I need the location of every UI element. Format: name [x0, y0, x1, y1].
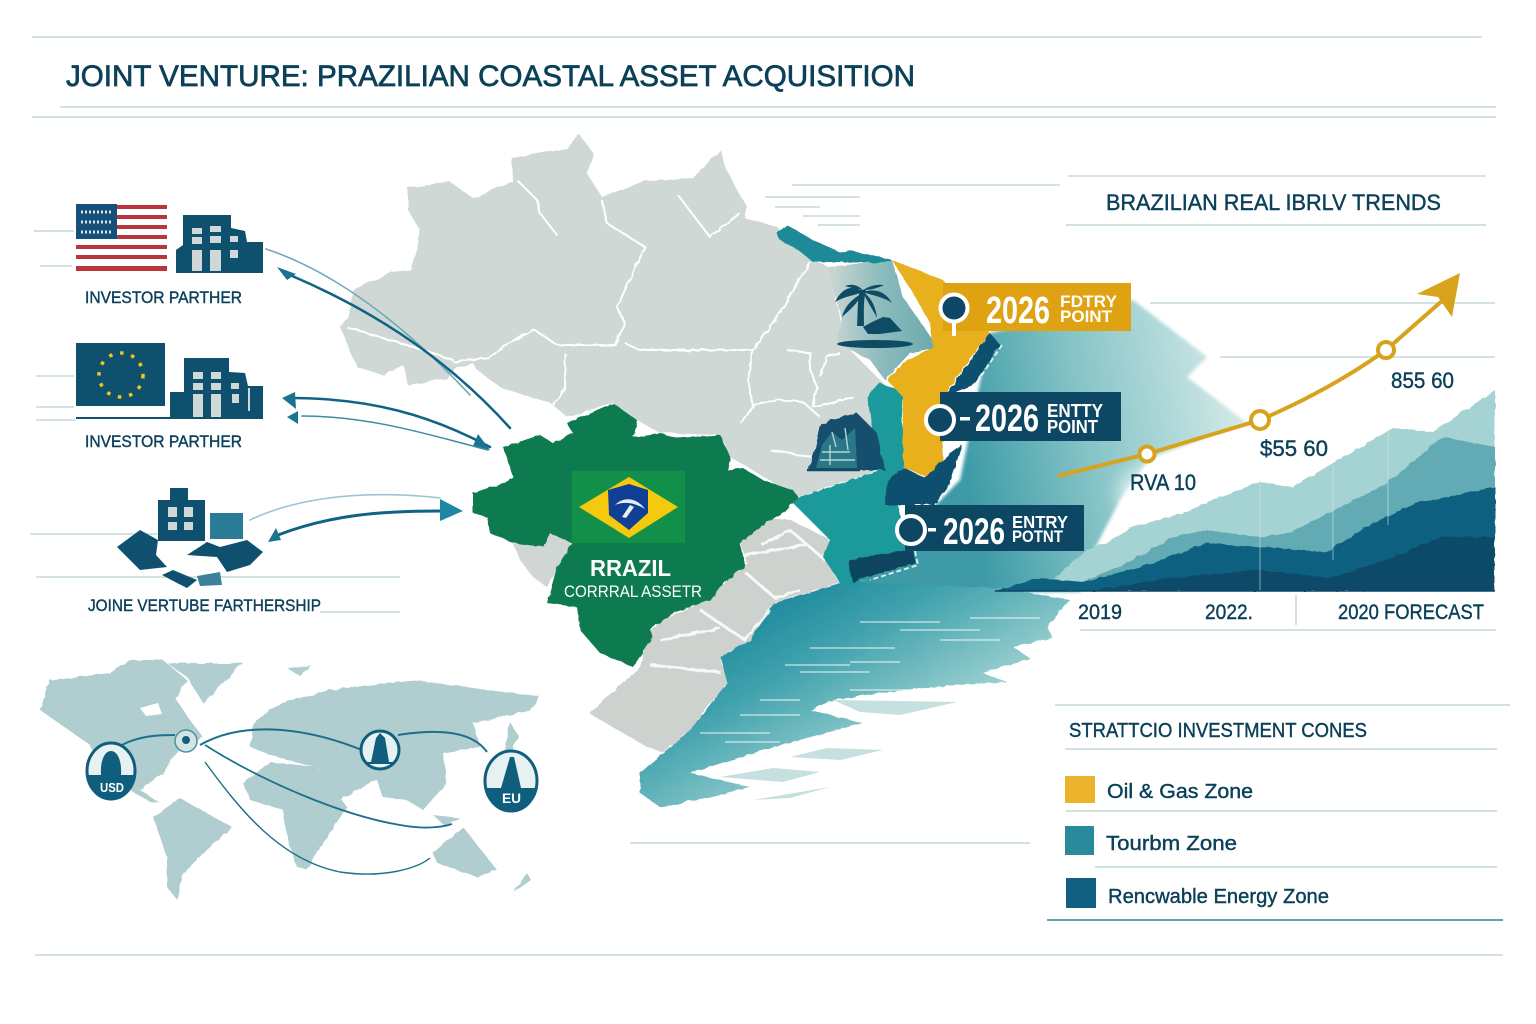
badge: USD: USD	[100, 780, 124, 795]
regional borders	[347, 180, 853, 672]
arrow: US partner outgoing	[266, 249, 470, 395]
legend item: tourism: Tourbm Zone	[1106, 833, 1237, 855]
tourism zone, central coast	[790, 383, 907, 585]
legend bottom rule	[1047, 919, 1503, 921]
Brazilian flag	[572, 471, 685, 543]
partner label: INVESTOR PARTHER	[85, 289, 242, 307]
axis labels: 2022.	[1205, 601, 1253, 624]
south-west neutral region	[513, 533, 572, 587]
data labels: 855 60	[1391, 368, 1454, 393]
legend item: oil and gas	[1065, 776, 1253, 803]
title: JOINT VENTURE: PRAZILIAN COASTAL ASSET ACQUISITION	[66, 60, 915, 93]
icon: EU flag	[76, 343, 165, 406]
entry point: gold: POINT	[1060, 307, 1113, 326]
continents	[40, 660, 540, 900]
south-east neutral regions	[590, 518, 840, 753]
icon: coastal cliff	[807, 413, 885, 470]
legend item: oil and gas: Oil & Gas Zone	[1107, 781, 1253, 803]
oil and gas zone	[887, 260, 990, 477]
region subtitle: CORRRAL ASSETR	[564, 583, 702, 601]
mountain area, mid layer	[1060, 437, 1495, 591]
entry point: navy upper: POINT	[1047, 417, 1098, 437]
badge: USD	[87, 743, 135, 799]
world map	[40, 660, 540, 900]
entry point: navy upper: 2026	[975, 398, 1039, 440]
data markers	[1140, 342, 1394, 462]
lower ocean	[640, 582, 1070, 807]
tourism zone, pale northern region	[827, 260, 933, 380]
data labels: RVA 10	[1130, 470, 1196, 495]
renewable zone, southern coast	[848, 548, 915, 582]
entry point: navy lower: ENTRY	[1012, 512, 1068, 532]
renewable zone, coast	[885, 333, 1000, 505]
arrow: US partner return	[277, 267, 510, 428]
chart heading: BRAZILIAN REAL IBRLV TRENDS	[1106, 190, 1441, 215]
investor partner: European Union	[76, 343, 263, 451]
legend item: renewable energy	[1066, 878, 1329, 908]
axis labels: 2019	[1078, 601, 1122, 624]
legend item: tourism	[1065, 826, 1237, 855]
icon: office building	[76, 358, 263, 419]
axis labels: 2020 FORECAST	[1338, 601, 1484, 624]
region name: RRAZIL	[590, 555, 671, 581]
white haze behind first label	[1120, 463, 1230, 527]
partner label: INVESTOR PARTHER	[85, 433, 242, 451]
entry point: navy upper	[926, 392, 1121, 441]
legend: strategic investment zones	[1047, 720, 1503, 920]
chart axis	[995, 590, 1495, 592]
tourism zone, northern strip	[777, 225, 892, 263]
legend heading: STRATTCIO INVESTMENT CONES	[1069, 720, 1367, 742]
arrow: partnership upper	[250, 495, 440, 520]
icon: office building	[176, 215, 263, 273]
badge: small hub	[175, 730, 197, 752]
route lines	[122, 729, 487, 874]
trend arrowhead	[1417, 273, 1460, 317]
coastal foam	[870, 345, 1002, 580]
entry point: gold: 2026	[986, 290, 1050, 332]
partnership label: JOINE VERTUBE FARTHERSHIP	[88, 596, 321, 615]
entry point: navy lower: 2026	[943, 511, 1005, 552]
entry point: gold: FDTRY	[1060, 292, 1118, 311]
icon: palm island	[835, 285, 913, 348]
arrow: EU partner lower	[287, 411, 488, 450]
trend line	[1058, 300, 1443, 476]
central asset region, green	[473, 403, 798, 667]
joint venture partnership	[88, 488, 321, 615]
badge: EU	[485, 751, 537, 811]
entry point: navy lower: POTNT	[1012, 527, 1064, 546]
data labels	[1130, 368, 1454, 495]
wave streaks	[700, 618, 1040, 742]
legend item: renewable energy: Rencwable Energy Zone	[1108, 886, 1329, 908]
mountain area, light layer	[1040, 390, 1495, 591]
ocean fan behind entry points	[850, 300, 1247, 592]
entry point: gold	[940, 283, 1131, 336]
entry point: navy lower	[897, 505, 1084, 552]
chart grid lines	[1260, 430, 1388, 590]
axis labels	[1078, 601, 1484, 624]
capital flow arrows	[250, 249, 510, 542]
white lake cutouts	[140, 703, 162, 716]
pale sea patches	[720, 700, 957, 800]
entry point: navy upper: ENTTY	[1047, 401, 1103, 421]
arrow: EU partner upper	[282, 392, 490, 450]
mountain area, dark layer	[995, 487, 1495, 591]
chart: BRL trend	[995, 190, 1495, 624]
data labels: $55 60	[1260, 436, 1328, 461]
investor partner: United States	[76, 204, 263, 307]
icon: building and handshake	[117, 488, 263, 588]
mountain area, darkest layer	[1090, 537, 1495, 591]
badge: central	[361, 731, 399, 769]
badge: EU: EU	[502, 790, 521, 806]
arrow: partnership lower	[268, 499, 463, 542]
main map of Brazil, neutral regions	[340, 135, 885, 753]
icon: US flag	[76, 204, 167, 271]
